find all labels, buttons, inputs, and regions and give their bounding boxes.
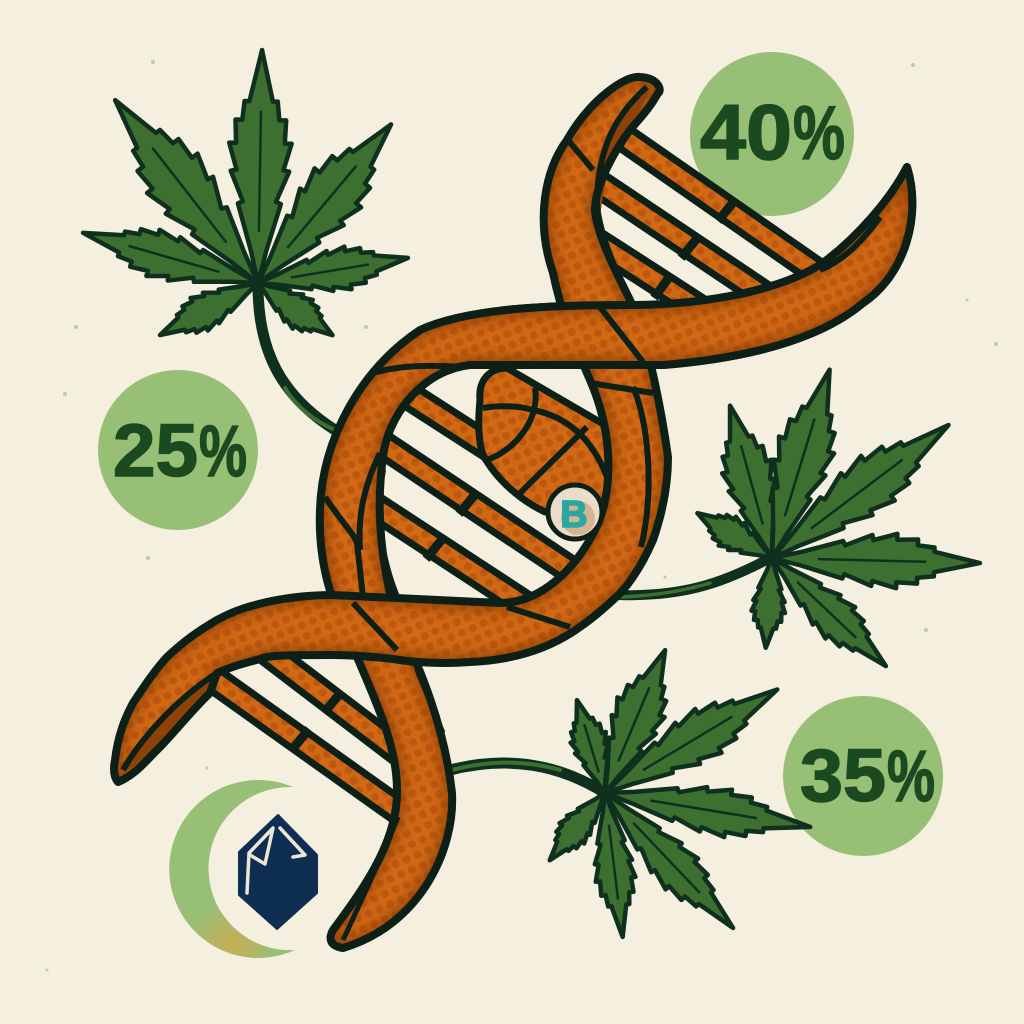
cannabis leaf: right	[689, 361, 981, 682]
crescent moon	[169, 780, 295, 958]
circle badge: 40%	[690, 52, 854, 216]
left arc seams	[325, 366, 570, 650]
shaded inner strips	[125, 90, 650, 772]
circle badge: 25%: %	[199, 412, 247, 492]
dna rungs: bottom	[205, 650, 410, 819]
dna rungs: top	[590, 128, 830, 312]
circle badge: 40%: 40	[700, 88, 792, 176]
dna strand: S-curve	[320, 167, 912, 948]
dna strand: reverse curve	[114, 77, 668, 782]
stem: right leaf	[615, 557, 772, 597]
teal badge: B	[560, 494, 588, 536]
dna rungs: middle	[365, 390, 590, 608]
stem: bottom leaf	[450, 762, 605, 793]
stem: top-left leaf	[258, 285, 335, 430]
circle badge: 25%: 25	[113, 409, 198, 492]
circle badge: 35%: 35	[800, 734, 886, 817]
basketball shape	[479, 368, 625, 512]
circle badge: 35%	[783, 696, 943, 856]
navy hexagon icon	[239, 815, 317, 929]
cannabis leaf: bottom	[537, 640, 814, 943]
circle badge: 25%	[98, 370, 258, 530]
dna strand: upper crossing over	[500, 163, 916, 369]
teal badge	[548, 485, 602, 539]
circle badge: 35%: %	[887, 737, 935, 817]
cannabis leaf: top left	[76, 49, 414, 351]
circle badge: 40%: %	[793, 91, 845, 176]
